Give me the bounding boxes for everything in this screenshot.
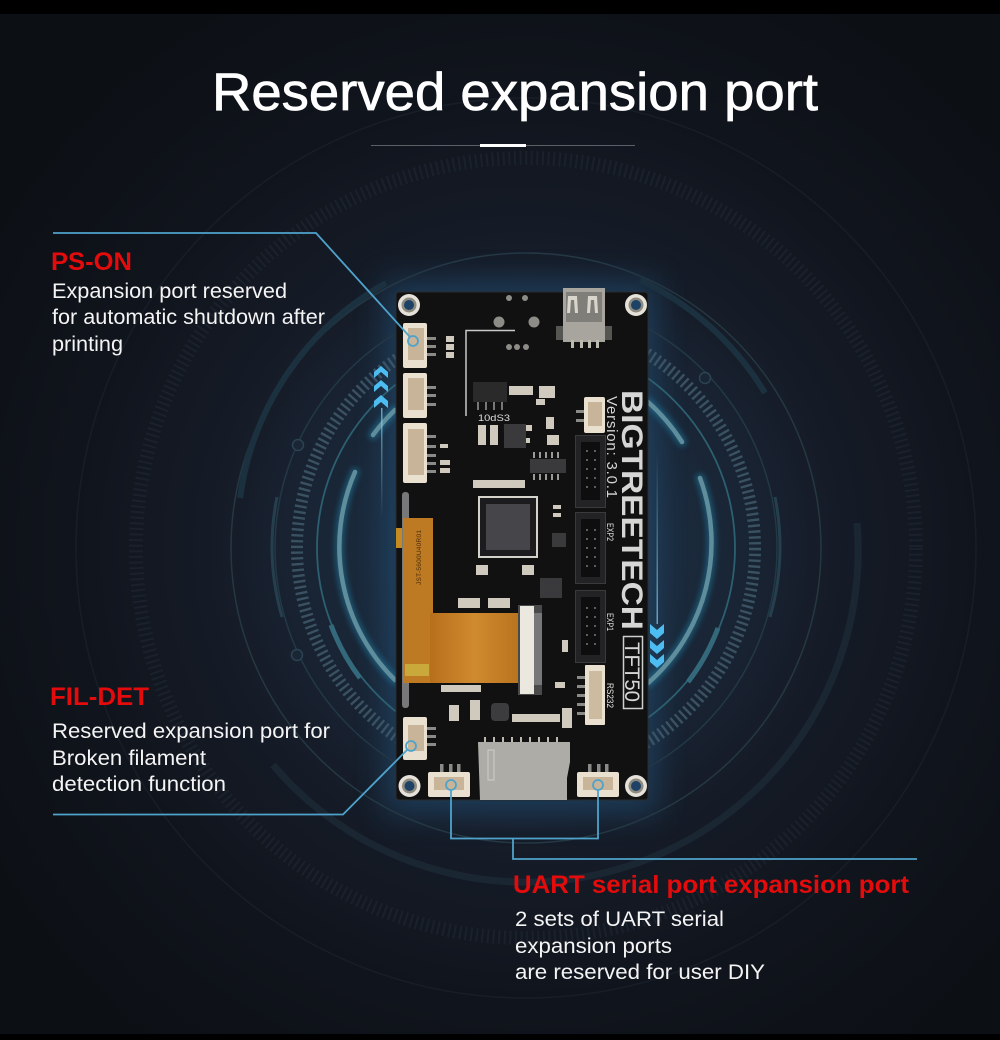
mounting holes — [398, 294, 647, 797]
silk outline — [466, 330, 515, 416]
callout text: PS-ON: printing — [52, 332, 123, 356]
rs232 connector — [577, 665, 615, 725]
callout line: FIL-DET — [53, 741, 416, 814]
brand text — [603, 390, 648, 630]
through holes — [494, 295, 540, 350]
title: Reserved expansion port — [212, 63, 818, 122]
hud rings behind the board — [76, 98, 976, 998]
callout text: UART — [513, 871, 910, 984]
callout text: UART: are reserved for user DIY — [515, 960, 765, 984]
flex cable — [396, 492, 519, 708]
left side connectors — [403, 323, 436, 760]
board plate — [396, 292, 648, 800]
box headers: EXP1 — [605, 613, 615, 631]
flex cable: JST-5600U40R01 — [416, 530, 423, 585]
box headers: EXP2 — [605, 523, 615, 541]
pin header: 10dS3 — [478, 413, 510, 423]
smd parts — [440, 336, 572, 728]
sd card slot — [478, 737, 570, 800]
callout text: PS-ON: for automatic shutdown after — [52, 305, 325, 329]
right side top connector — [576, 397, 605, 433]
callout text: PS-ON: Expansion port reserved — [52, 279, 287, 303]
pin header — [473, 382, 510, 423]
callout text: UART: 2 sets of UART serial — [515, 907, 724, 931]
bottom uart connectors — [428, 764, 619, 797]
circuit board — [396, 288, 648, 800]
title divider — [371, 144, 635, 147]
callout text: FIL-DET: Reserved expansion port for — [52, 719, 330, 743]
black ics — [504, 424, 566, 598]
callout text: PS-ON — [51, 248, 325, 356]
rs232 connector: RS232 — [605, 683, 615, 708]
callout text: FIL-DET: Broken filament — [52, 746, 206, 770]
callout text: FIL-DET: FIL-DET — [50, 683, 149, 711]
callout text: UART: expansion ports — [515, 934, 672, 958]
box headers — [576, 436, 615, 662]
decorative down arrow right of board — [650, 450, 664, 668]
callout line: UART — [446, 780, 917, 859]
callout text: FIL-DET: detection function — [52, 772, 226, 796]
callout text: PS-ON: PS-ON — [51, 248, 132, 276]
usb port — [556, 288, 612, 348]
callout text: FIL-DET — [50, 683, 330, 796]
callout text: UART: UART serial port expansion port — [513, 871, 910, 899]
small chip — [491, 703, 509, 721]
zif connector — [518, 605, 542, 695]
model badge: TFT50 — [620, 642, 643, 702]
brand text: BIGTREETECH — [615, 390, 648, 630]
glowing inner arcs — [339, 402, 712, 683]
decorative up arrow left of board — [374, 366, 388, 518]
main processor — [478, 496, 538, 558]
brand text: Version: 3.0.1 — [603, 396, 620, 498]
callout line: PS-ON — [53, 233, 418, 346]
